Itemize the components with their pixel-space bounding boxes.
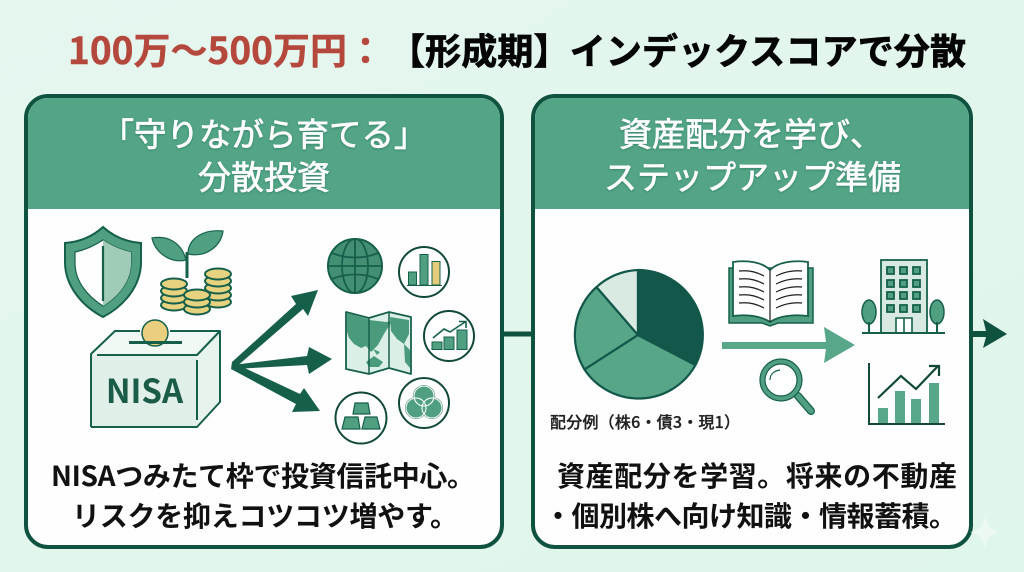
arrows: diversify xyxy=(231,290,332,412)
text: right body: ・個別株へ向け知識・情報蓄積。 xyxy=(544,495,957,535)
icon: magnifier xyxy=(760,359,811,411)
panel header: right xyxy=(535,98,969,209)
title: 【形成期】インデックスコアで分散 xyxy=(389,23,966,75)
icon: gold bars circle xyxy=(336,392,386,444)
icon: globe xyxy=(328,239,382,293)
text: right body: 資産配分を学習。将来の不動産 xyxy=(557,455,957,495)
connector between panels xyxy=(500,332,536,336)
text: left body: リスクを抑えコツコツ増やす。 xyxy=(72,495,458,535)
heading: right xyxy=(604,108,901,199)
icon: building xyxy=(862,260,945,333)
heading: left xyxy=(101,109,427,199)
icon: growth chart circle xyxy=(424,311,474,361)
icon: shield xyxy=(65,227,141,317)
heading: right: 資産配分を学び、 xyxy=(619,108,883,156)
icon: world map xyxy=(346,312,411,374)
panel: left xyxy=(26,96,502,547)
sparkle xyxy=(970,516,1000,549)
icon: coin xyxy=(142,320,168,346)
panel header: left xyxy=(28,98,500,209)
arrow: to next step xyxy=(722,327,855,363)
icon: sprout and coins xyxy=(152,231,231,314)
title: 100万〜500万円： xyxy=(68,21,384,75)
text: right body xyxy=(544,455,957,535)
icon: open book xyxy=(729,261,813,326)
text: left body xyxy=(51,455,475,535)
heading: left: 「守りながら育てる」 xyxy=(101,109,427,156)
icon: NISA box xyxy=(91,320,220,427)
pie caption: 配分例（株6・債3・現1） xyxy=(550,409,740,433)
arrow: next stage xyxy=(971,319,1007,348)
text: left body: NISAつみたて枠で投資信託中心。 xyxy=(51,455,475,495)
icon: venn circle xyxy=(399,378,449,428)
heading: left: 分散投資 xyxy=(198,151,330,199)
label: NISA: NISA xyxy=(106,365,184,413)
panel: right xyxy=(533,96,971,547)
icon: bar chart circle xyxy=(399,247,449,297)
title xyxy=(68,21,966,75)
icon: growth chart xyxy=(869,363,945,424)
heading: right: ステップアップ準備 xyxy=(604,151,901,199)
pie chart xyxy=(575,270,703,399)
